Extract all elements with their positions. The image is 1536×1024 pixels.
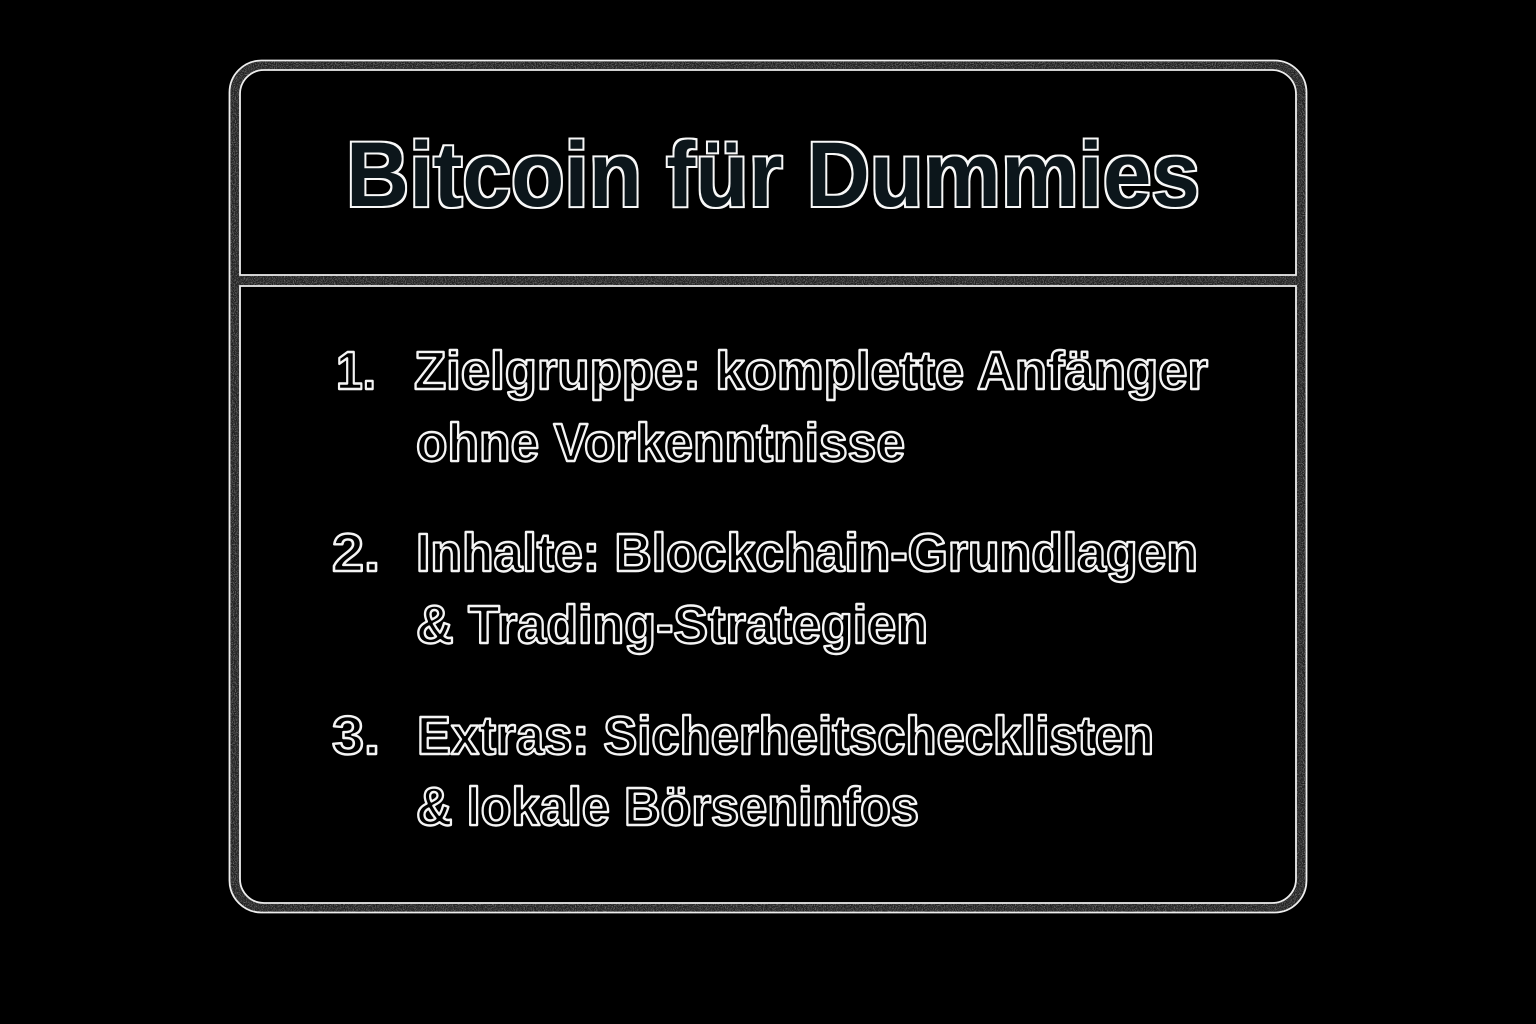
list item 3: 3. <box>332 706 380 766</box>
panel: list <box>240 286 1296 903</box>
list item 1: 1. <box>336 341 376 401</box>
list item 3: Extras: Sicherheitschecklisten <box>417 706 1154 766</box>
list item 2: Inhalte: Blockchain-Grundlagen <box>416 523 1198 583</box>
list item 1: Zielgruppe: komplette Anfänger <box>414 341 1208 401</box>
list item 1: ohne Vorkenntnisse <box>416 413 905 473</box>
list item 2: 2. <box>332 523 380 583</box>
list item 2 <box>332 523 1198 655</box>
card frame <box>230 60 1306 912</box>
list item 1 <box>336 341 1208 473</box>
title: Bitcoin für Dummies <box>346 124 1200 226</box>
panel: title <box>240 70 1296 275</box>
list item 3: & lokale Börseninfos <box>416 777 919 837</box>
list item 2: & Trading-Strategien <box>416 595 928 655</box>
list item 3 <box>332 706 1154 837</box>
